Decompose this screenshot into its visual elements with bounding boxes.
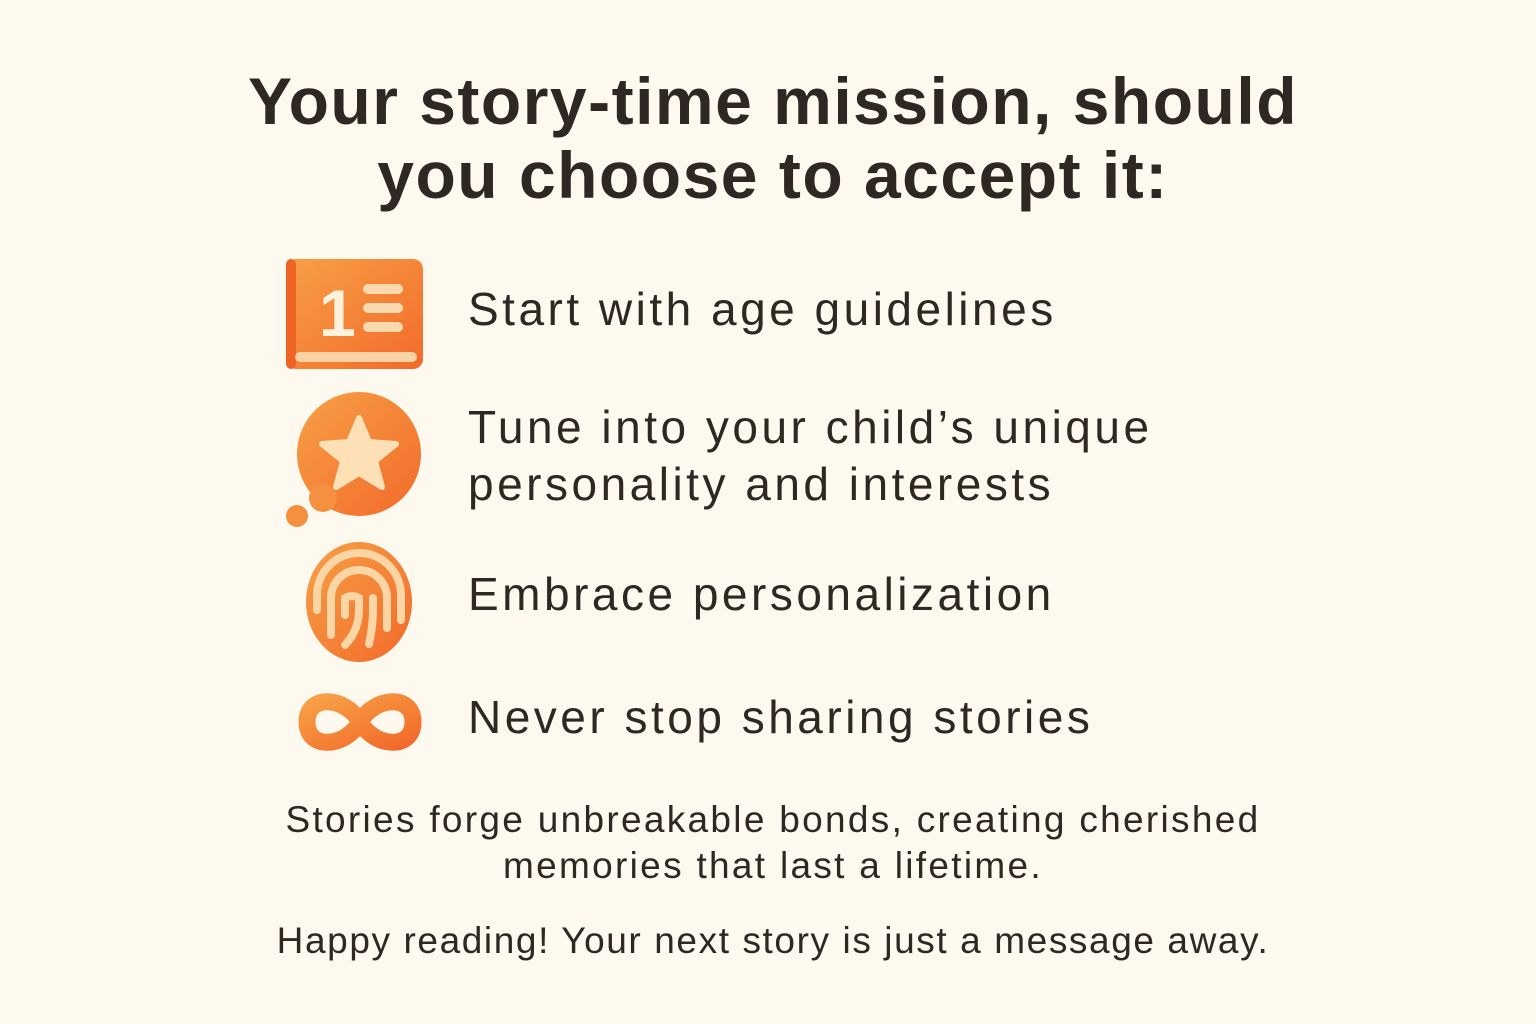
closing message (285, 799, 1260, 886)
icon: fingerprint (306, 542, 412, 662)
text: personality (468, 401, 1153, 510)
text: age guidelines: Start with age guidelines (468, 283, 1057, 335)
icon: numbered book (286, 259, 423, 369)
icon: star bubble (286, 392, 421, 527)
text: personalization: Embrace personalization (468, 568, 1055, 620)
text: personality: personality and interests (468, 458, 1054, 510)
title: you choose to accept it: (377, 138, 1169, 212)
title: Your story-time mission, should (248, 64, 1298, 138)
text: sharing stories: Never stop sharing stories (468, 691, 1093, 743)
closing message: memories that last a lifetime. (503, 845, 1043, 886)
icon: numbered book: 1 (319, 276, 356, 350)
closing message: Stories forge unbreakable bonds, creating cherished (285, 799, 1260, 840)
sign-off: Happy reading! Your next story is just a message away. (277, 920, 1269, 961)
icon: infinity (298, 693, 422, 751)
title (248, 64, 1298, 212)
text: personality: Tune into your child’s unique (468, 401, 1153, 453)
